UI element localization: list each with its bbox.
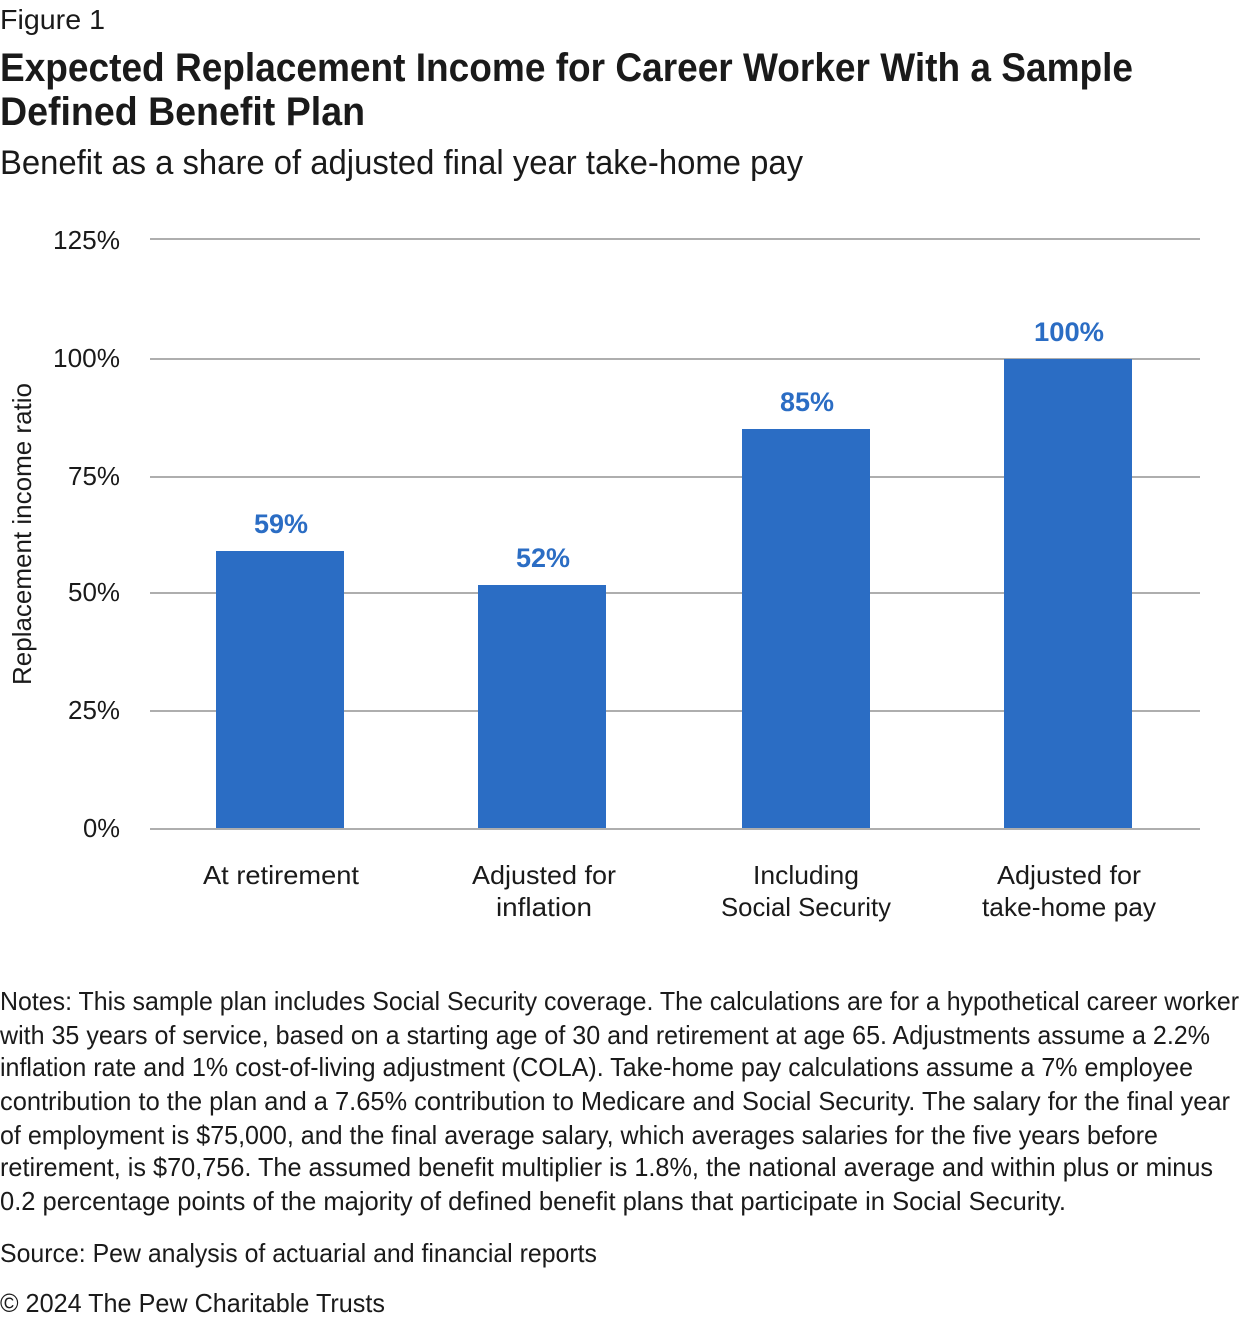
bar chart — [7, 225, 1200, 922]
notes: 0.2 percentage points of the majority of defined benefit plans that participate in Social Security. — [0, 1186, 1066, 1216]
source: Source: Pew analysis of actuarial and financial reports — [0, 1238, 597, 1268]
y-axis title: Replacement income ratio — [7, 383, 37, 685]
bar: adjusted for take-home pay 100% — [1004, 317, 1132, 828]
y-axis tick labels — [53, 225, 120, 843]
subtitle: Benefit as a share of adjusted final year take-home pay — [0, 144, 803, 182]
bar: adjusted for take-home pay 100%: 100% — [1034, 317, 1104, 347]
y-axis tick labels: 0% — [83, 813, 120, 843]
notes: with 35 years of service, based on a starting age of 30 and retirement at age 65. Adjustments assume a 2.2% — [0, 1020, 1210, 1050]
x-axis category labels: inflation — [496, 892, 592, 922]
bar: adjusted for inflation 52% — [478, 543, 606, 828]
y-axis tick labels: 100% — [53, 343, 120, 373]
y-axis tick labels: 50% — [68, 577, 120, 607]
bar: at retirement 59% — [216, 509, 344, 828]
y-axis tick labels: 75% — [68, 461, 120, 491]
x-axis category labels: Social Security — [721, 892, 891, 922]
copyright: © 2024 The Pew Charitable Trusts — [0, 1288, 385, 1318]
bar: including social security 85%: 85% — [780, 387, 834, 417]
x-axis category labels: At retirement — [203, 860, 360, 890]
notes: retirement, is $70,756. The assumed benefit multiplier is 1.8%, the national average and within plus or minus — [0, 1152, 1213, 1182]
x-axis category labels: take-home pay — [982, 892, 1156, 922]
x-axis category labels: Adjusted for — [472, 860, 616, 890]
bar: at retirement 59%: 59% — [254, 509, 308, 539]
title: Expected Replacement Income for Career Worker With a Sample — [0, 46, 1133, 90]
notes — [0, 986, 1239, 1216]
title: Defined Benefit Plan — [0, 90, 365, 134]
notes: contribution to the plan and a 7.65% contribution to Medicare and Social Security. The salary for the final year — [0, 1086, 1230, 1116]
x-axis category labels: Including — [753, 860, 859, 890]
figure label: Figure 1 — [0, 4, 105, 35]
x-axis category labels — [203, 860, 1156, 922]
y-axis tick labels: 125% — [53, 225, 120, 255]
y-axis tick labels: 25% — [68, 695, 120, 725]
title — [0, 46, 1133, 134]
bar: including social security 85% — [742, 387, 870, 828]
bar: adjusted for inflation 52%: 52% — [516, 543, 570, 573]
notes: inflation rate and 1% cost-of-living adjustment (COLA). Take-home pay calculations assume a 7% employee — [0, 1052, 1193, 1082]
x-axis category labels: Adjusted for — [997, 860, 1141, 890]
notes: of employment is $75,000, and the final average salary, which averages salaries for the five years before — [0, 1120, 1158, 1150]
